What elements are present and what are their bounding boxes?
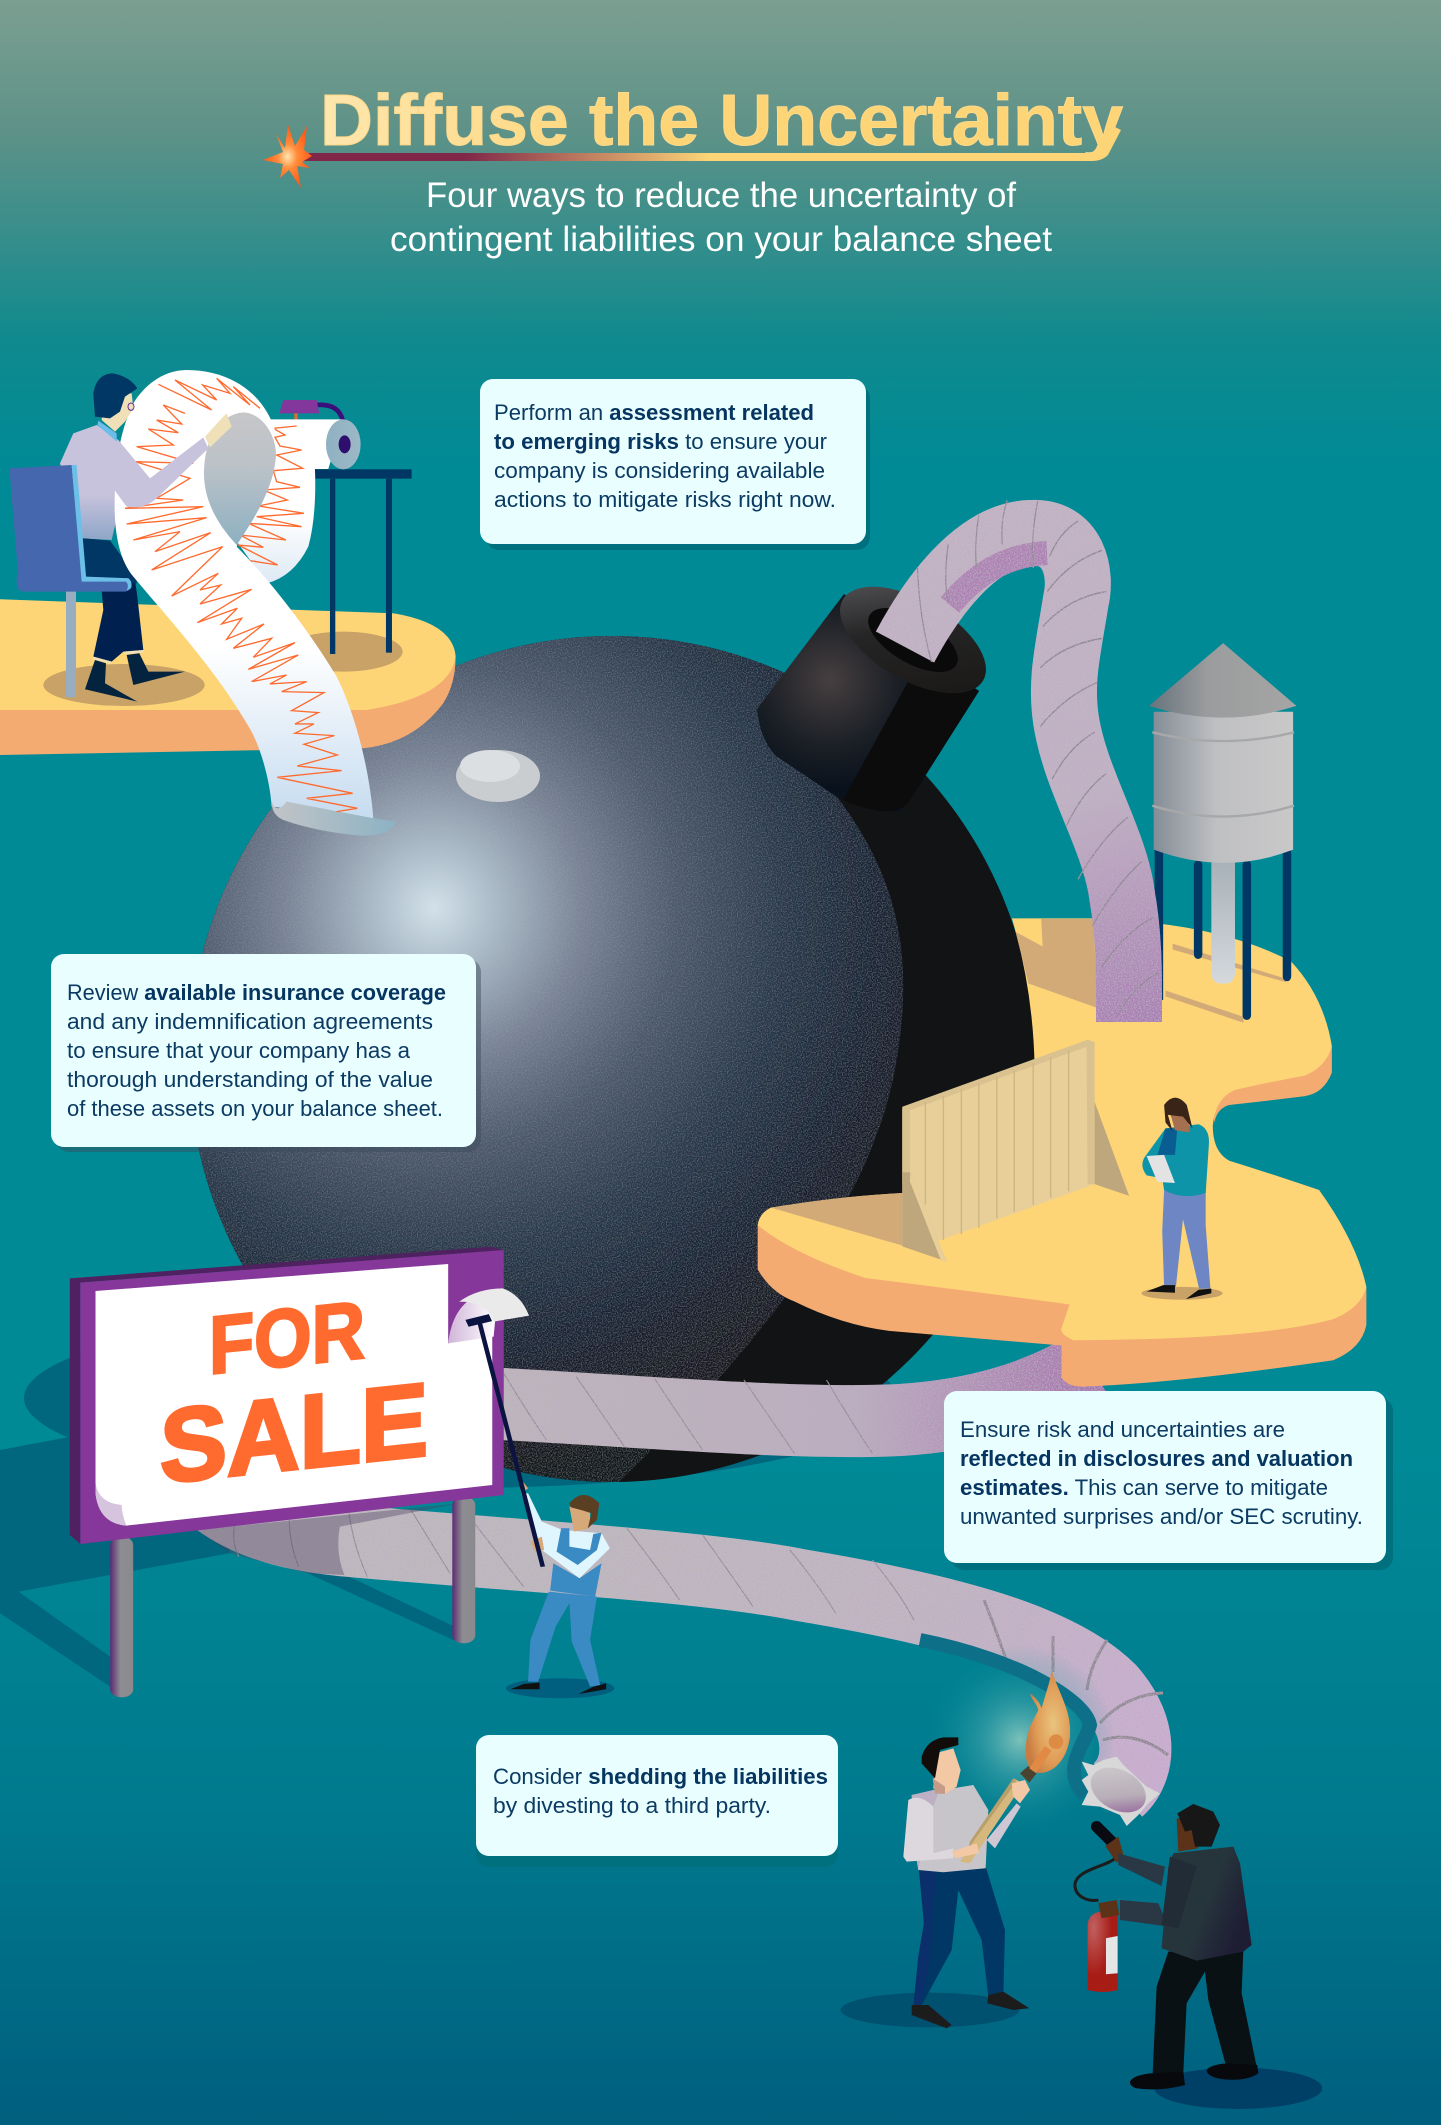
fuse lower band [190, 1470, 1168, 1790]
printer [279, 400, 343, 425]
title [263, 81, 1123, 188]
glow from match [925, 1645, 1115, 1835]
fuse burst end [1082, 1757, 1160, 1826]
bomb neck [757, 594, 979, 812]
ground shadows [0, 1308, 896, 1687]
bomb cap [823, 565, 1003, 715]
flame [1026, 1670, 1070, 1773]
man with match [841, 1737, 1037, 2028]
callout: disclosures: reflected in disclosures and valuation [960, 1446, 1353, 1471]
bomb cap hole [858, 595, 968, 685]
left island [0, 370, 456, 836]
icon: spark [263, 125, 312, 188]
sign curl bottom [96, 1483, 126, 1526]
paper curl [272, 802, 397, 836]
subtitle [390, 176, 1052, 259]
callout: insurance coverage: thorough understanding of the value [67, 1067, 433, 1092]
man with roller [467, 1318, 614, 1698]
fence [902, 1040, 1129, 1262]
table [313, 469, 412, 654]
fuse middle band [330, 1365, 1090, 1453]
chair [9, 465, 132, 697]
woman with clipboard [1141, 1098, 1223, 1300]
callout: insurance coverage: of these assets on your balance sheet. [67, 1096, 443, 1121]
island top surface [758, 918, 1366, 1340]
subtitle: Four ways to reduce the uncertainty of [426, 176, 1016, 215]
seated man upper [93, 373, 232, 507]
callout: insurance coverage: and any indemnification agreements [67, 1009, 433, 1034]
callout: disclosures: Ensure risk and uncertainties are [960, 1417, 1285, 1442]
callout: disclosures: unwanted surprises and/or SEC scrutiny. [960, 1504, 1363, 1529]
for sale text: SALE [160, 1362, 428, 1506]
island side [758, 1046, 1366, 1387]
fuse upper [905, 501, 1158, 1022]
bomb neck right side [843, 660, 979, 811]
for sale text: FOR [209, 1285, 365, 1392]
paper roll back strip [233, 419, 361, 583]
bomb lit side [198, 636, 904, 1482]
callout: emerging risks: company is considering available [494, 458, 825, 483]
subtitle: contingent liabilities on your balance sheet [390, 220, 1052, 259]
callout: emerging risks [480, 379, 870, 550]
zigzag readout [125, 378, 357, 812]
fuse underline [298, 127, 1121, 161]
people with match and extinguisher [841, 1670, 1322, 2109]
sign shadow on fuse [197, 1503, 459, 1575]
person shadow [43, 664, 205, 706]
island top [0, 599, 456, 710]
callout: insurance coverage [51, 954, 481, 1152]
man with extinguisher [1075, 1804, 1322, 2109]
title text: Diffuse the Uncertainty [320, 81, 1123, 161]
for sale text [160, 1285, 428, 1506]
sign paper [96, 1264, 492, 1526]
paper hole [204, 412, 276, 545]
callout: insurance coverage: to ensure that your company has a [67, 1038, 410, 1063]
callout: disclosures: estimates. This can serve to mitigate [960, 1475, 1328, 1500]
island shadows [771, 919, 1286, 1246]
bomb highlight [456, 750, 540, 802]
bomb [150, 565, 1035, 1500]
bomb body dark [189, 636, 1035, 1482]
paper main sheet [115, 370, 397, 836]
sign frame [70, 1247, 504, 1544]
roller pole [479, 1320, 543, 1567]
seated man lower [60, 425, 185, 702]
table shadow [284, 632, 403, 672]
shadow under fuse end [920, 1640, 1090, 1795]
callout: shedding liabilities [476, 1735, 838, 1867]
callout: emerging risks: actions to mitigate risks right now. [494, 487, 836, 512]
callout: emerging risks: to emerging risks to ensure your [494, 429, 827, 454]
right island [758, 643, 1366, 1387]
callout: emerging risks: Perform an assessment related [494, 400, 814, 425]
water tower [1149, 643, 1296, 1020]
sign curl top [448, 1295, 495, 1343]
for sale sign [70, 1247, 529, 1697]
callout: disclosures [944, 1391, 1393, 1570]
callout: shedding liabilities: by divesting to a third party. [493, 1793, 771, 1818]
callout: insurance coverage: Review available insurance coverage [67, 980, 446, 1005]
callout: shedding liabilities: Consider shedding the liabilities [493, 1764, 828, 1789]
island side [0, 657, 456, 755]
sign posts [110, 1497, 475, 1697]
